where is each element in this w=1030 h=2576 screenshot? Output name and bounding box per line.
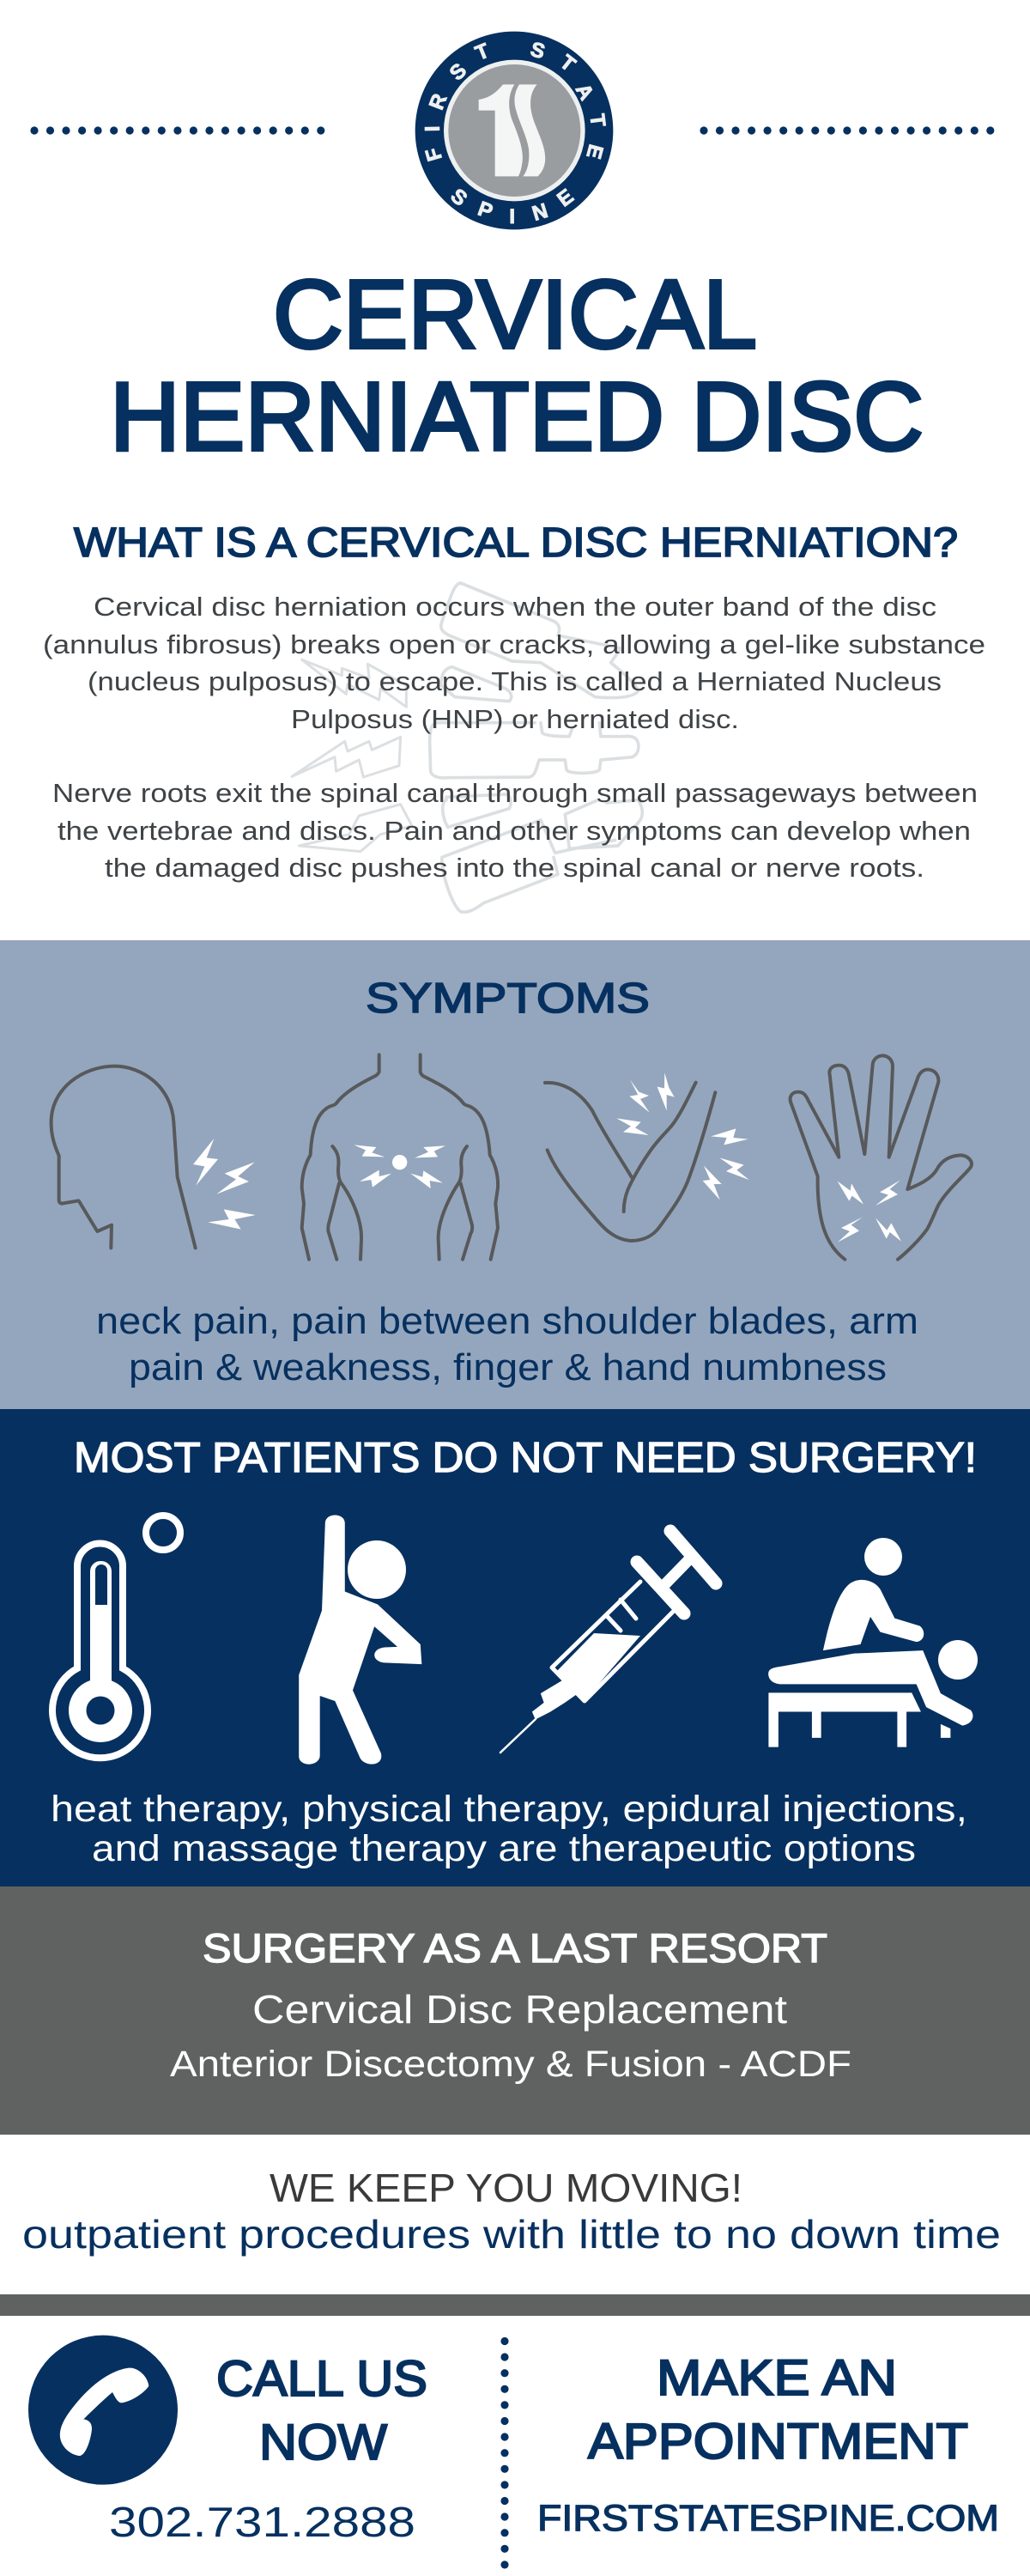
symptoms description: neck pain, pain between shoulder blades, arm (96, 1300, 918, 1342)
icon: physical therapy figure (299, 1516, 421, 1765)
symptoms description: pain & weakness, finger & hand numbness (129, 1346, 887, 1388)
intro text: Pulposus (HNP) or herniated disc. (291, 704, 739, 734)
phone number: 302.731.2888 (109, 2500, 415, 2546)
title (110, 260, 924, 471)
therapy options text: heat therapy, physical therapy, epidural injections, (51, 1789, 967, 1830)
call us now: CALL US (216, 2351, 427, 2407)
panel: most patients do not need surgery (0, 1409, 1030, 1886)
icon: thermometer (52, 1516, 180, 1758)
logo: First State Spine: S (528, 38, 548, 64)
call us now: NOW (259, 2415, 387, 2470)
title: CERVICAL (273, 260, 757, 368)
make an appointment: MAKE AN (657, 2350, 897, 2406)
call us now (216, 2351, 427, 2470)
logo: First State Spine: S (445, 59, 471, 85)
divider bar (0, 2294, 1030, 2316)
website: FIRSTSTATESPINE.COM (537, 2498, 999, 2539)
logo: First State Spine: E (581, 142, 608, 161)
logo: First State Spine: E (553, 185, 578, 211)
logo: First State Spine (415, 32, 613, 229)
symptoms heading: SYMPTOMS (366, 975, 650, 1022)
intro text: Nerve roots exit the spinal canal through small passageways between (52, 778, 978, 808)
intro text: the damaged disc pushes into the spinal canal or nerve roots. (105, 853, 924, 883)
logo: First State Spine: T (585, 112, 609, 128)
symptoms description (96, 1300, 918, 1388)
therapy options text: and massage therapy are therapeutic options (92, 1828, 916, 1869)
logo: First State Spine: P (475, 197, 496, 224)
we keep you moving: WE KEEP YOU MOVING! (270, 2166, 742, 2210)
logo: First State Spine: R (425, 91, 451, 113)
icon: arm pain (545, 1072, 749, 1241)
title: HERNIATED DISC (110, 362, 924, 471)
intro text: (annulus fibrosus) breaks open or cracks, allowing a gel-like substance (43, 629, 985, 659)
therapy heading: MOST PATIENTS DO NOT NEED SURGERY! (74, 1435, 977, 1481)
icon: pain between shoulder blades (302, 1054, 498, 1260)
header dots left (30, 126, 324, 135)
logo: First State Spine: S (446, 184, 471, 210)
icon: phone (28, 2336, 178, 2485)
logo: First State Spine: T (555, 51, 580, 76)
intro text: the vertebrae and discs. Pain and other symptoms can develop when (58, 816, 971, 846)
intro text: (nucleus pulposus) to escape. This is called a Herniated Nucleus (88, 666, 942, 696)
intro text: Cervical disc herniation occurs when the outer band of the disc (94, 592, 936, 622)
panel: surgery as a last resort (0, 1886, 1030, 2135)
surgery options (170, 1987, 851, 2085)
surgery options: Cervical Disc Replacement (252, 1987, 787, 2032)
make an appointment: APPOINTMENT (588, 2414, 968, 2470)
we keep you moving (22, 2166, 1001, 2257)
surgery options: Anterior Discectomy & Fusion - ACDF (170, 2044, 851, 2085)
watermark: spine with pain bolts (292, 583, 642, 912)
logo: First State Spine: A (571, 80, 598, 104)
logo: First State Spine: I (509, 205, 515, 228)
make an appointment (588, 2350, 968, 2470)
icon: neck pain (52, 1066, 256, 1248)
we keep you moving: outpatient procedures with little to no down time (22, 2212, 1001, 2257)
vertical dots (500, 2337, 509, 2568)
icon: epidural injection syringe (500, 1531, 716, 1753)
panel: symptoms (0, 940, 1030, 1409)
icon: massage therapy (768, 1538, 978, 1747)
logo: First State Spine: T (472, 39, 493, 65)
logo: First State Spine: F (421, 145, 447, 164)
logo: First State Spine: I (421, 125, 445, 132)
logo: First State Spine: N (530, 199, 550, 226)
icon: hand numbness (791, 1055, 972, 1260)
surgery heading: SURGERY AS A LAST RESORT (203, 1925, 827, 1971)
intro text (43, 592, 985, 883)
therapy options text (51, 1789, 967, 1869)
heading: what is a cervical disc herniation: WHAT IS A CERVICAL DISC HERNIATION? (74, 520, 958, 566)
header dots right (700, 126, 994, 135)
